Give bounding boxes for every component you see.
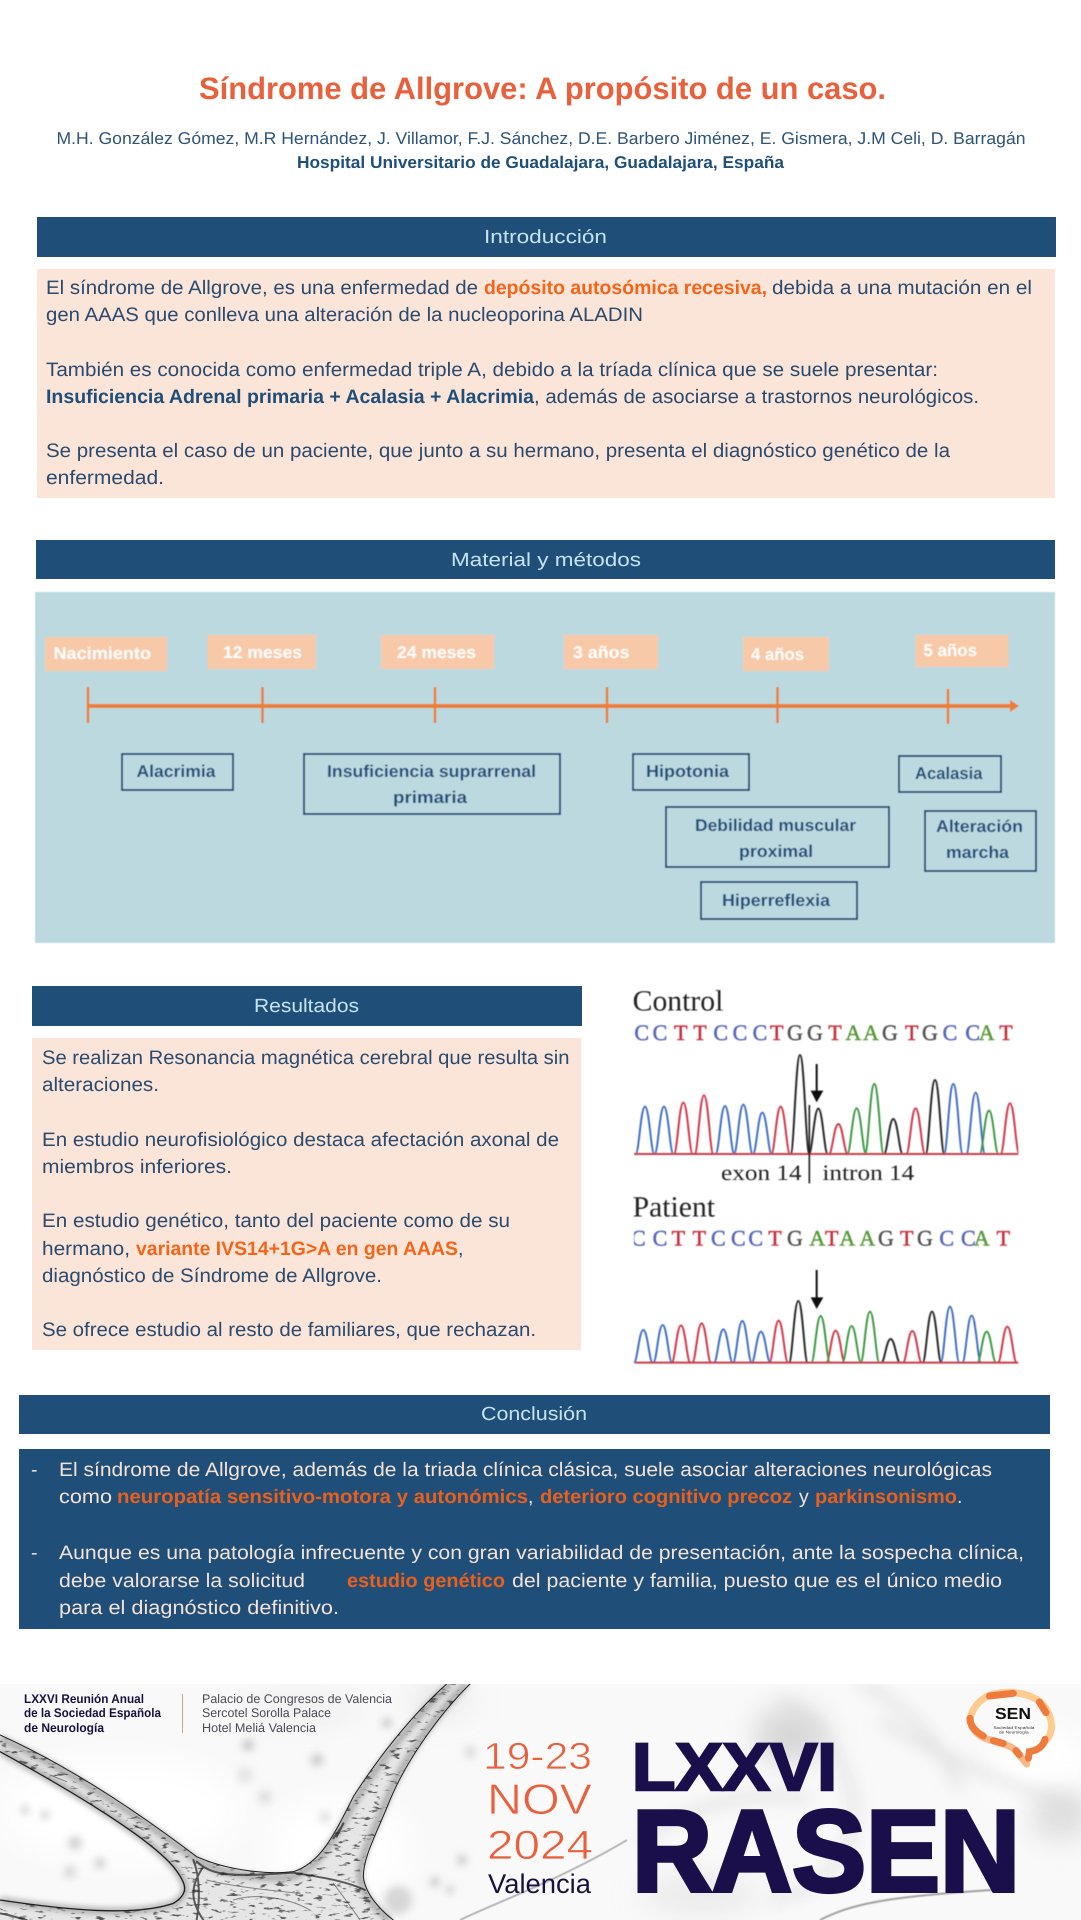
- patient sequence letters: C: [653, 1226, 667, 1251]
- patient sequence letters: A: [809, 1226, 825, 1251]
- patient sequence letters: A: [839, 1226, 855, 1251]
- patient arrow: [811, 1270, 823, 1309]
- symptom boxes: marcha: [946, 843, 1010, 862]
- patient sequence letters: C: [631, 1226, 646, 1251]
- panel: timeline: [35, 592, 1055, 943]
- patient sequence letters: C: [711, 1226, 726, 1251]
- control sequence letters: C: [753, 1021, 767, 1045]
- patient sequence letters: C: [961, 1226, 976, 1251]
- time labels: 3 años: [573, 643, 630, 662]
- congress description: Hotel Meliá Valencia: [202, 1721, 316, 1735]
- banner: congress footer: [0, 1684, 1081, 1920]
- panel: resultados text: Se realizan Resonancia magnética cerebral que resulta sin: [42, 1047, 570, 1069]
- panel: conclusión text: como: [59, 1486, 112, 1508]
- neuron: [0, 1684, 470, 1920]
- panel: resultados text: [32, 1038, 581, 1350]
- exon/intron marker and arrow: intron 14: [822, 1161, 914, 1185]
- patient sequence letters: C: [939, 1226, 954, 1251]
- title: Síndrome de Allgrove: A propósito de un caso.: [199, 71, 886, 106]
- label: Control: Control: [633, 985, 723, 1017]
- patient sequence letters: C: [731, 1226, 746, 1251]
- control sequence letters: G: [882, 1021, 898, 1045]
- panel: introducción text: , además de asociarse a trastornos neurológicos.: [534, 386, 979, 408]
- control sequence letters: T: [828, 1021, 842, 1045]
- panel: resultados text: En estudio neurofisiológico destaca afectación axonal de: [42, 1129, 559, 1151]
- patient sequence letters: A: [974, 1226, 990, 1251]
- label: Patient: Patient: [633, 1191, 715, 1223]
- icon: SEN logo: Sociedad Española: [993, 1725, 1034, 1730]
- panel: introducción text: También es conocida como enfermedad triple A, debido a la tríada clínica que se suele presentar:: [46, 359, 938, 381]
- time labels: 5 años: [924, 641, 977, 660]
- time labels: 12 meses: [223, 643, 302, 662]
- patient sequence letters: T: [693, 1226, 706, 1251]
- patient sequence letters: [631, 1226, 1010, 1251]
- blurred background neurons: [0, 1684, 1081, 1920]
- congress name: RASEN: [632, 1786, 1020, 1916]
- patient sequence letters: G: [878, 1226, 894, 1251]
- icon: SEN logo: SEN: [995, 1705, 1031, 1723]
- heading: Introducción: Introducción: [484, 227, 607, 248]
- exon/intron marker and arrow: exon 14: [721, 1161, 802, 1185]
- panel: introducción text: Se presenta el caso de un paciente, que junto a su hermano, presenta el diagnóstico genético de la: [46, 440, 950, 462]
- heading: Conclusión: [19, 1395, 1050, 1434]
- dates: 19-23: [483, 1736, 592, 1778]
- patient sequence letters: T: [900, 1226, 913, 1251]
- congress description: de Neurología: [24, 1721, 105, 1735]
- panel: conclusión text: del paciente y familia, puesto que es el único medio: [512, 1570, 1002, 1592]
- panel: resultados text: En estudio genético, tanto del paciente como de su: [42, 1210, 510, 1232]
- panel: introducción text: [37, 269, 1055, 498]
- panel: conclusión text: debe valorarse la solicitud: [59, 1570, 305, 1592]
- authors and affiliation: M.H. González Gómez, M.R Hernández, J. Villamor, F.J. Sánchez, D.E. Barbero Jiménez, E. Gismera, J.M Celi, D. Barragán: [56, 129, 1026, 148]
- panel: introducción text: gen AAAS que conlleva una alteración de la nucleoporina ALADIN: [46, 304, 643, 326]
- symptom boxes: [122, 754, 1036, 919]
- panel: introducción text: Insuficiencia Adrenal primaria + Acalasia + Alacrimia: [46, 386, 534, 408]
- symptom boxes: proximal: [739, 842, 813, 861]
- panel: resultados text: variante IVS14+1G>A en gen AAAS: [136, 1238, 458, 1260]
- control sequence letters: A: [863, 1021, 879, 1045]
- dates: 2024: [487, 1822, 593, 1868]
- symptom boxes: Alacrimia: [136, 762, 216, 781]
- congress description: Sercotel Sorolla Palace: [202, 1706, 331, 1720]
- dates: Valencia: [488, 1869, 592, 1899]
- patient sequence letters: T: [997, 1226, 1010, 1251]
- congress description: de la Sociedad Española: [24, 1706, 162, 1720]
- panel: resultados text: miembros inferiores.: [42, 1156, 232, 1178]
- panel: conclusión text: deterioro cognitivo precoz: [540, 1486, 792, 1508]
- control sequence letters: G: [787, 1021, 803, 1045]
- panel: resultados text: ,: [458, 1238, 463, 1260]
- patient trace: [634, 1301, 1018, 1363]
- patient sequence letters: T: [825, 1226, 838, 1251]
- panel: resultados text: alteraciones.: [42, 1074, 159, 1096]
- control sequence letters: C: [634, 1021, 649, 1045]
- congress name: LXXVI: [632, 1730, 837, 1805]
- symptom boxes: Hipotonia: [646, 762, 730, 781]
- panel: resultados text: hermano,: [42, 1238, 130, 1260]
- symptom boxes: Alteración: [936, 817, 1023, 836]
- dates: NOV: [487, 1776, 592, 1824]
- symptom boxes: Acalasia: [915, 764, 983, 783]
- time labels: Nacimiento: [54, 644, 151, 663]
- congress description: LXXVI Reunión Anual: [24, 1692, 144, 1706]
- panel: conclusión text: y: [799, 1486, 809, 1508]
- control sequence letters: T: [693, 1021, 707, 1045]
- chart: DNA sequencing chromatograms: [631, 985, 1019, 1363]
- control sequence letters: G: [807, 1021, 823, 1045]
- patient sequence letters: T: [768, 1226, 782, 1251]
- control sequence letters: T: [999, 1021, 1013, 1045]
- control trace: [634, 1055, 1019, 1154]
- patient sequence letters: G: [787, 1226, 803, 1251]
- panel: conclusión text: .: [957, 1486, 962, 1508]
- heading: Resultados: Resultados: [254, 996, 359, 1017]
- timeline arrow: [88, 687, 1019, 724]
- heading: Material y métodos: [36, 540, 1055, 579]
- panel: introducción text: debida a una mutación en el: [772, 277, 1032, 299]
- time labels: 4 años: [751, 645, 804, 664]
- symptom boxes: Debilidad muscular: [695, 816, 856, 835]
- heading: Conclusión: Conclusión: [481, 1404, 587, 1425]
- icon: SEN logo: [970, 1692, 1052, 1764]
- panel: resultados text: diagnóstico de Síndrome de Allgrove.: [42, 1265, 382, 1287]
- control sequence letters: C: [965, 1021, 980, 1045]
- time labels: [45, 635, 1008, 671]
- panel: conclusión text: Aunque es una patología infrecuente y con gran variabilidad de presentación, ante la sospecha clínica,: [59, 1542, 1024, 1564]
- time labels: 24 meses: [397, 643, 476, 662]
- control sequence letters: [634, 1021, 1013, 1045]
- panel: resultados text: Se ofrece estudio al resto de familiares, que rechazan.: [42, 1319, 536, 1341]
- control sequence letters: A: [845, 1021, 861, 1045]
- panel: conclusión text: -: [31, 1542, 38, 1564]
- heading: Resultados: [32, 986, 582, 1026]
- panel: conclusión text: estudio genético: [347, 1570, 505, 1592]
- dates: [486, 1742, 592, 1894]
- panel: introducción text: depósito autosómica recesiva,: [484, 277, 767, 299]
- control sequence letters: T: [674, 1021, 687, 1045]
- icon: SEN logo: de Neurología: [999, 1730, 1029, 1734]
- congress description: [24, 1692, 392, 1735]
- panel: conclusión text: para el diagnóstico definitivo.: [59, 1597, 339, 1619]
- congress description: Palacio de Congresos de Valencia: [202, 1692, 392, 1706]
- authors and affiliation: [56, 129, 1026, 172]
- patient sequence letters: G: [917, 1226, 933, 1251]
- heading: Material y métodos: Material y métodos: [451, 550, 641, 571]
- panel: introducción text: El síndrome de Allgrove, es una enfermedad de: [46, 277, 478, 299]
- panel: conclusión text: neuropatía sensitivo-motora y autonómics: [117, 1486, 528, 1508]
- panel: conclusión text: parkinsonismo: [815, 1486, 957, 1508]
- patient sequence letters: A: [859, 1226, 875, 1251]
- control sequence letters: C: [713, 1021, 728, 1045]
- symptom boxes: Hiperreflexia: [722, 891, 831, 910]
- symptom boxes: primaria: [393, 788, 468, 807]
- panel: conclusión text: -: [31, 1459, 38, 1481]
- control sequence letters: A: [979, 1021, 995, 1045]
- panel: introducción text: enfermedad.: [46, 467, 164, 489]
- patient sequence letters: C: [748, 1226, 763, 1251]
- panel: conclusión text: [19, 1449, 1050, 1629]
- panel: conclusión text: ,: [528, 1486, 533, 1508]
- control sequence letters: G: [922, 1021, 938, 1045]
- congress name: [635, 1742, 1014, 1894]
- authors and affiliation: Hospital Universitario de Guadalajara, Guadalajara, España: [297, 153, 785, 172]
- control sequence letters: C: [653, 1021, 667, 1045]
- control sequence letters: T: [905, 1021, 918, 1045]
- control sequence letters: C: [943, 1021, 957, 1045]
- control sequence letters: T: [770, 1021, 783, 1045]
- exon/intron marker and arrow: [721, 1064, 914, 1185]
- control sequence letters: C: [733, 1021, 747, 1045]
- heading: Introducción: [37, 217, 1056, 257]
- panel: conclusión text: El síndrome de Allgrove, además de la triada clínica clásica, suele asociar alteraciones neurológicas: [59, 1459, 992, 1481]
- patient sequence letters: T: [672, 1226, 685, 1251]
- symptom boxes: Insuficiencia suprarrenal: [327, 762, 536, 781]
